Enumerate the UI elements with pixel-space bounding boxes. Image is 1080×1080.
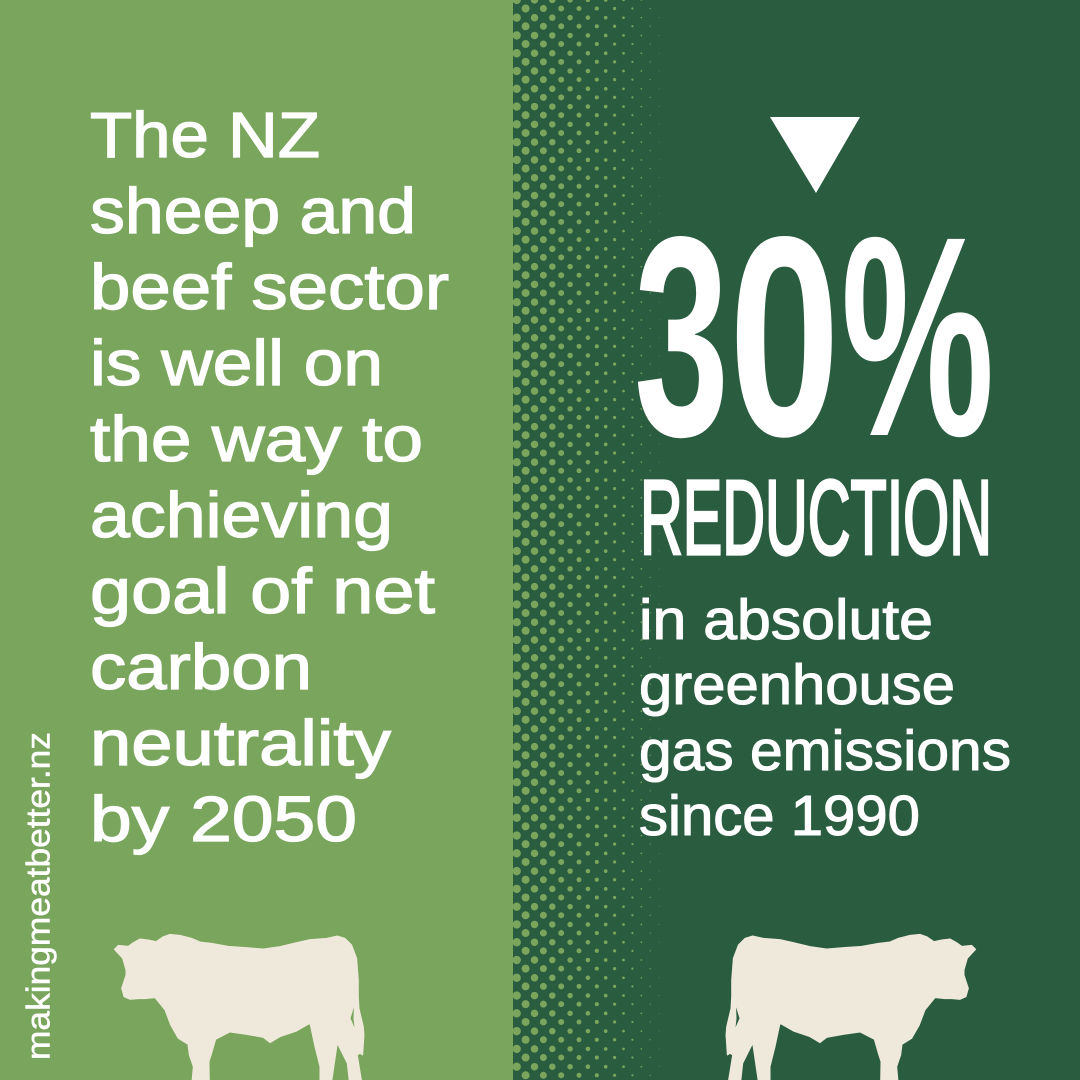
big number: 30%: 0 <box>729 178 840 496</box>
big number: 30%: 3 <box>634 177 729 496</box>
website label, vertical: makingmeatbetter.nz <box>20 732 56 1060</box>
heading: left statement: the way to <box>90 403 423 475</box>
heading: left statement: sheep and <box>90 175 416 247</box>
text block: right description: in absolute <box>639 588 933 652</box>
big number: 30% <box>634 177 994 496</box>
icon: downward triangle <box>770 117 860 193</box>
heading: left statement: beef sector <box>90 251 449 323</box>
halftone dot gradient <box>517 0 659 1080</box>
big number: 30%: % <box>841 177 994 496</box>
panel: light green left <box>0 0 513 1080</box>
heading: left statement: The NZ <box>90 99 320 171</box>
heading: left statement: goal of net <box>90 555 435 627</box>
text block: right description: gas emissions <box>639 719 1011 783</box>
panel: dark green right <box>513 0 1080 1080</box>
text block: right description <box>639 588 1011 848</box>
heading: left statement: carbon <box>90 631 312 703</box>
text block: right description: since 1990 <box>639 784 920 848</box>
heading: left statement: neutrality <box>90 707 391 779</box>
heading: left statement: by 2050 <box>90 783 357 855</box>
text block: right description: greenhouse <box>639 653 955 717</box>
icon: cow silhouette left <box>114 934 364 1080</box>
heading: left statement <box>90 99 449 855</box>
heading: left statement: achieving <box>90 479 393 551</box>
icon: cow silhouette right <box>726 934 976 1080</box>
heading: left statement: is well on <box>90 327 383 399</box>
